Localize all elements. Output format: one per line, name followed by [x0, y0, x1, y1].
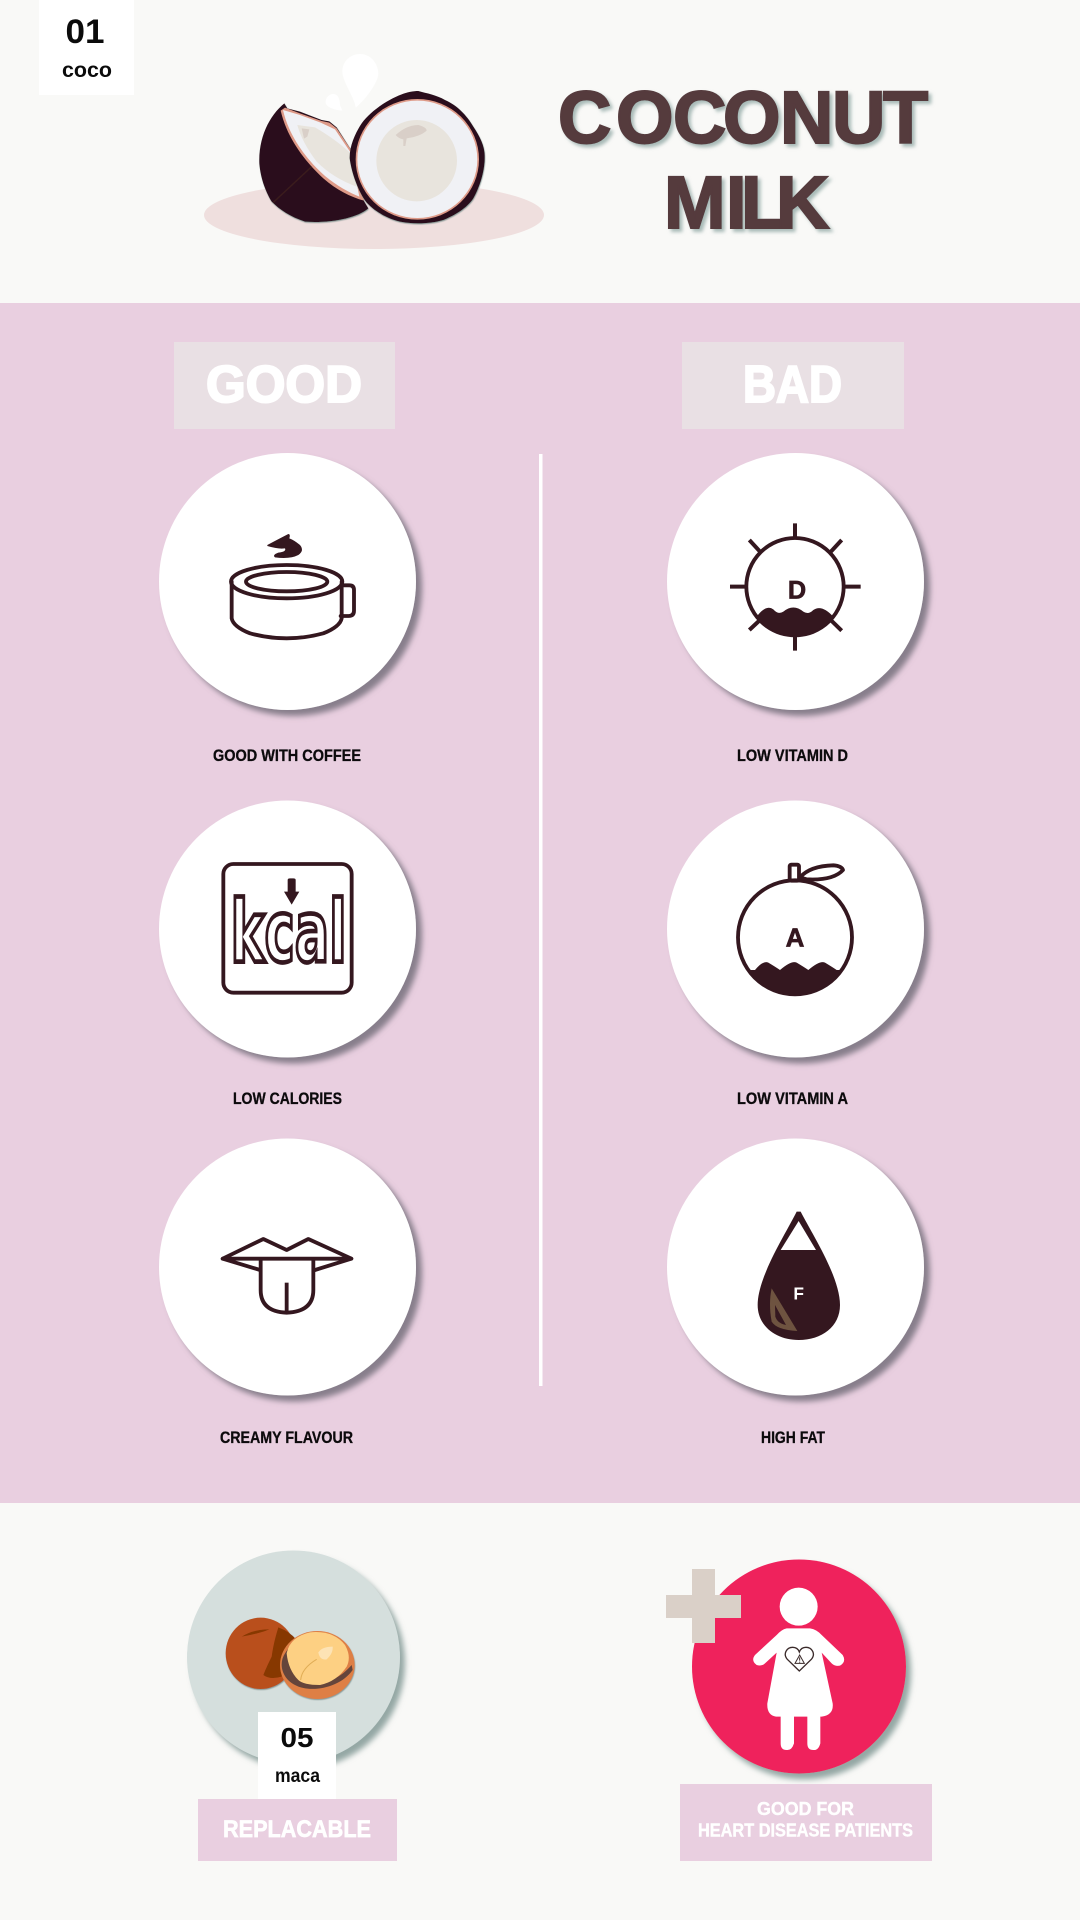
title [558, 76, 928, 244]
item: low vitamin d [667, 453, 924, 765]
item: low calories: LOW CALORIES [233, 1090, 342, 1108]
item: low vitamin a [667, 800, 924, 1108]
badge: 05 maca: 05 [280, 1722, 314, 1753]
item: good with coffee [159, 453, 416, 765]
panel: replacable macadamia [187, 1550, 400, 1861]
item: good with coffee: GOOD WITH COFFEE [213, 747, 361, 765]
panel: good for heart disease patients [666, 1560, 932, 1861]
panel: good and bad comparison [0, 303, 1080, 1503]
plate ellipse [204, 181, 544, 249]
label: good for heart disease patients: HEART DISEASE PATIENTS [698, 1820, 913, 1840]
item: creamy flavour: CREAMY FLAVOUR [220, 1429, 353, 1447]
badge: 01 coco: 01 [66, 13, 104, 51]
illustration: coconut halves [204, 54, 544, 249]
milk droplets [326, 54, 378, 111]
label: good for heart disease patients: GOOD FOR [757, 1799, 854, 1819]
left coconut half [259, 103, 368, 222]
badge: 05 maca [258, 1712, 336, 1799]
icon: lips and tongue [223, 1239, 351, 1313]
circle backdrop [187, 1550, 400, 1764]
icon: patient figure with heart [753, 1588, 844, 1750]
item: low calories [159, 800, 416, 1108]
icon: macadamia nuts [226, 1618, 355, 1699]
icon: vitamin d sun: D [788, 576, 806, 604]
item: low vitamin a: LOW VITAMIN A [737, 1090, 848, 1108]
title: COCONUT [558, 76, 928, 159]
heading: good: GOOD [206, 356, 362, 414]
icon: vitamin a fruit [738, 865, 852, 994]
coconut artwork [259, 54, 485, 223]
badge: 01 coco: coco [62, 59, 112, 82]
panel background [0, 303, 1080, 1503]
label: good for heart disease patients [680, 1784, 932, 1861]
icon: kcal box [223, 864, 352, 993]
red circle [692, 1560, 906, 1774]
icon: coffee cup [231, 534, 354, 638]
label: replacable [198, 1799, 397, 1861]
right coconut half [350, 91, 485, 223]
label: replacable: REPLACABLE [223, 1816, 371, 1843]
icon: fat droplet [758, 1212, 840, 1340]
center divider [539, 454, 542, 1386]
item: low vitamin d: LOW VITAMIN D [737, 747, 848, 765]
item: high fat: HIGH FAT [761, 1429, 825, 1447]
icon: fat droplet: F [793, 1283, 804, 1303]
title: MILK [664, 161, 829, 244]
item: high fat [667, 1138, 924, 1447]
heading: good [174, 342, 395, 429]
heading: bad [682, 342, 904, 429]
icon: vitamin d sun [730, 523, 861, 651]
icon: vitamin a fruit: A [786, 923, 805, 953]
item: creamy flavour [159, 1138, 416, 1447]
header [39, 0, 928, 249]
heading: bad: BAD [743, 356, 842, 414]
icon: kcal box: kcal [231, 882, 347, 982]
badge: 01 coco [39, 0, 134, 95]
badge: 05 maca: maca [275, 1766, 320, 1787]
icon: plus cross [666, 1569, 741, 1643]
